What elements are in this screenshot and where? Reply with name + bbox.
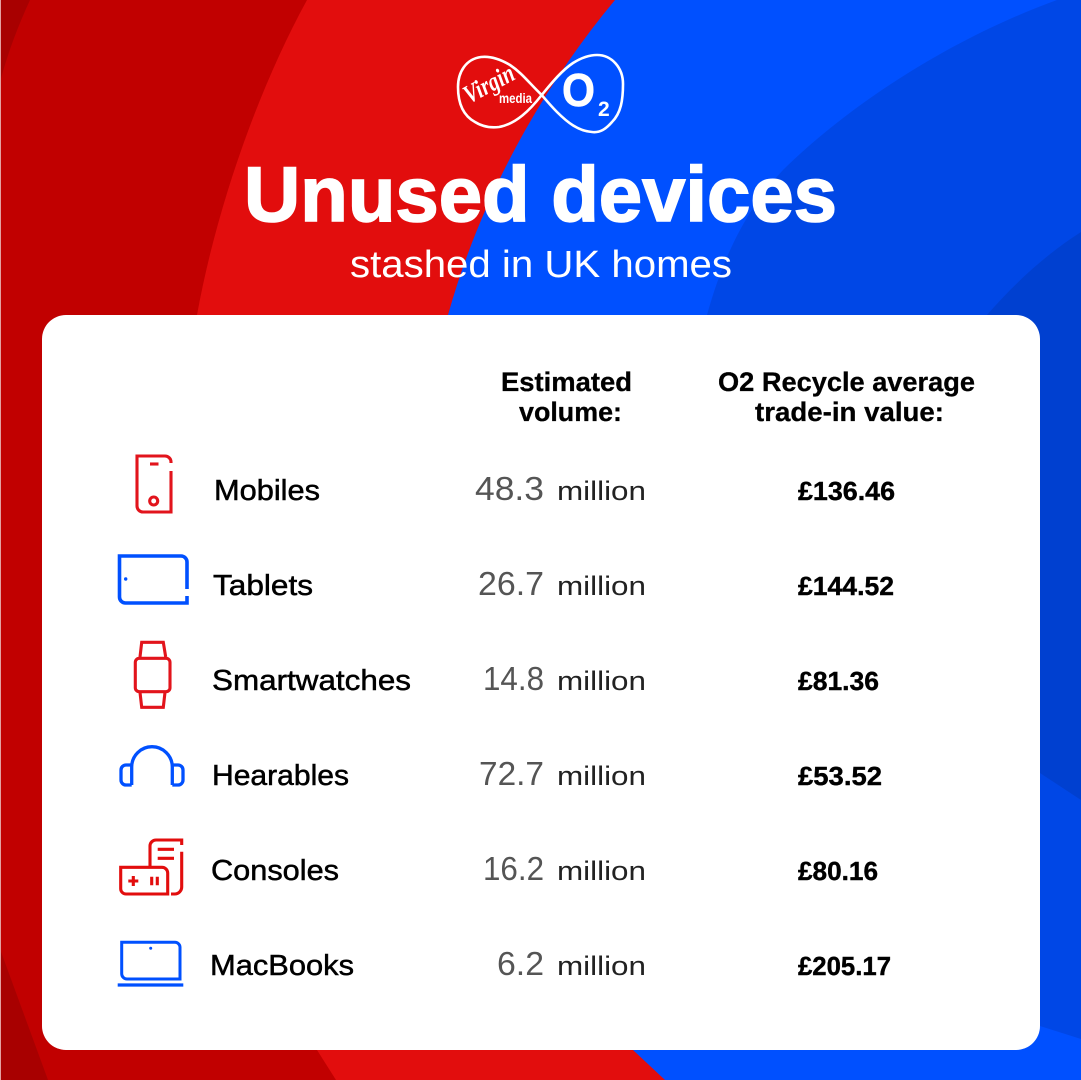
icon: headphones [121, 747, 183, 785]
row: mobiles: £136.46 [798, 476, 895, 506]
column heading: estimated volume: volume: [519, 397, 622, 427]
icon: mobile phone [137, 456, 171, 512]
logo text: 2: 2 [598, 98, 610, 121]
icon: laptop [118, 942, 183, 985]
row: mobiles: Mobiles [214, 475, 320, 507]
row: consoles: £80.16 [798, 856, 878, 886]
row: tablets: £144.52 [798, 571, 894, 601]
column heading: trade-in value: O2 Recycle average [718, 367, 975, 397]
row: macbooks: £205.17 [798, 951, 891, 981]
row: smartwatches: £81.36 [798, 666, 879, 696]
column heading: trade-in value [718, 367, 975, 427]
row: hearables: million [557, 761, 646, 791]
panel: device table [42, 315, 1040, 1050]
logo: Virgin Media O2 infinity mark [458, 55, 623, 132]
row: hearables [121, 747, 882, 792]
column heading: estimated volume: Estimated [501, 367, 632, 397]
row: mobiles: 48.3 [475, 470, 544, 507]
column heading: estimated volume [501, 367, 632, 427]
logo text: Virgin: Virgin [458, 58, 519, 109]
row: mobiles [137, 456, 895, 512]
row: tablets: Tablets [213, 570, 313, 602]
column heading: trade-in value: trade-in value: [755, 397, 944, 427]
icon: tablet [120, 556, 187, 603]
row: consoles: million [557, 856, 646, 886]
row: macbooks: MacBooks [210, 950, 354, 982]
row: consoles [121, 840, 878, 894]
row: hearables: 72.7 [479, 755, 544, 792]
row: smartwatches: Smartwatches [212, 665, 411, 697]
row: macbooks: 6.2 [497, 945, 544, 982]
icon: smartwatch [135, 642, 170, 707]
row: mobiles: million [557, 476, 646, 506]
icon: console and game [121, 840, 182, 894]
row: smartwatches: million [557, 666, 646, 696]
row: smartwatches [135, 642, 879, 707]
row: tablets [120, 556, 894, 603]
row: hearables: £53.52 [798, 761, 882, 791]
logo text: O: O [562, 64, 595, 116]
row: consoles: Consoles [211, 855, 339, 887]
row: tablets: 26.7 [478, 565, 544, 602]
row: macbooks [118, 942, 891, 985]
subtitle: stashed in UK homes [350, 244, 732, 286]
row: hearables: Hearables [212, 760, 349, 792]
row: smartwatches: 14.8 [483, 660, 544, 697]
row: macbooks: million [557, 951, 646, 981]
row: consoles: 16.2 [483, 850, 544, 887]
title: Unused devices [244, 150, 837, 238]
logo text: media: media [499, 91, 532, 106]
row: tablets: million [557, 571, 646, 601]
